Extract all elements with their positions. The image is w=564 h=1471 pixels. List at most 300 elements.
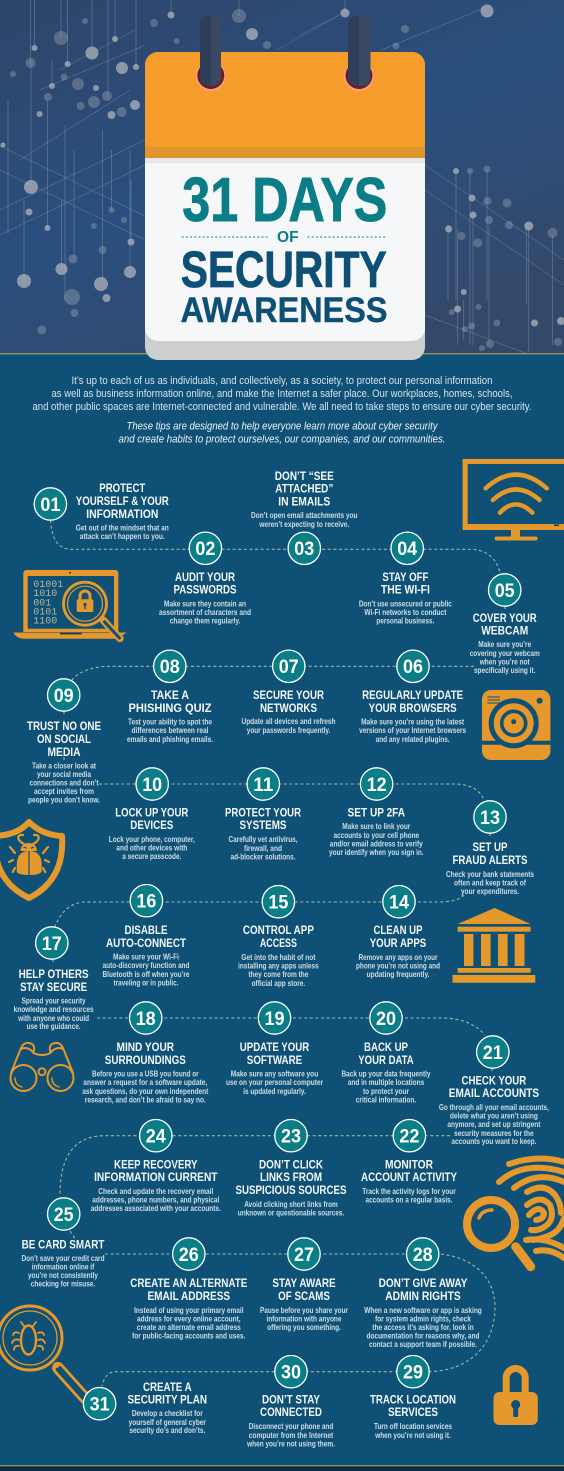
heading 31 <box>128 1380 207 1406</box>
badge 15: 15 <box>268 892 289 914</box>
heading 14: CLEAN UP <box>374 923 422 937</box>
description 27 <box>260 1305 349 1332</box>
description 19: Make sure any software you <box>231 1068 318 1078</box>
description 18: ask questions, do your own independent <box>82 1086 208 1096</box>
tip 06 <box>359 650 466 744</box>
description 01: Get out of the mindset that an <box>76 522 169 532</box>
description 17: knowledge and resources <box>14 1004 94 1014</box>
description 01 <box>76 522 169 541</box>
description 28: contact a support team if possible. <box>369 1339 477 1349</box>
badge 17: 17 <box>42 934 62 955</box>
description 23: unknown or questionable sources. <box>238 1208 344 1218</box>
description 11 <box>228 834 298 862</box>
description 02: Make sure they contain an <box>164 598 246 608</box>
description 10: a secure passcode. <box>122 851 181 861</box>
header network background <box>0 0 564 355</box>
description 09: Take a closer look at <box>32 760 96 770</box>
description 11: ad-blocker solutions. <box>230 852 296 862</box>
heading 21: CHECK YOUR <box>462 1074 527 1088</box>
heading 23: SUSPICIOUS SOURCES <box>236 1183 346 1197</box>
heading 10 <box>115 806 189 832</box>
heading 22: ACCOUNT ACTIVITY <box>361 1170 457 1184</box>
description 22: Track the activity logs for your <box>362 1186 456 1196</box>
heading 06 <box>362 688 463 715</box>
tip 15 <box>238 886 319 988</box>
badge 31: 31 <box>90 1394 110 1416</box>
description 22 <box>362 1186 456 1204</box>
heading 15: CONTROL APP <box>243 923 314 937</box>
description 18: Before you use a USB you found or <box>92 1068 199 1078</box>
tip 01 <box>34 481 169 541</box>
badge 27: 27 <box>294 1245 314 1266</box>
description 08 <box>127 716 213 744</box>
badge 29: 29 <box>403 1362 423 1384</box>
description 26: create an alternate email address <box>137 1322 241 1332</box>
heading 18 <box>105 1040 186 1067</box>
tip 03 <box>251 469 358 564</box>
tip 02 <box>159 532 251 626</box>
heading 12: SET UP 2FA <box>348 806 405 820</box>
description 26 <box>132 1305 245 1340</box>
description 15: Get into the habit of not <box>241 952 316 962</box>
description 01: attack can’t happen to you. <box>80 531 165 541</box>
heading 22 <box>361 1158 457 1184</box>
description 23: Avoid clicking short links from <box>244 1199 338 1209</box>
description 16: auto-discovery function and <box>102 960 190 970</box>
description 03 <box>251 510 358 529</box>
heading 13: FRAUD ALERTS <box>452 853 528 867</box>
description 10 <box>109 834 195 861</box>
heading 13: SET UP <box>472 840 508 854</box>
description 05: Make sure you’re <box>478 639 531 649</box>
binary digits: 01001 <box>33 580 63 591</box>
calendar ring right <box>344 16 374 91</box>
tip 28 <box>364 1238 482 1349</box>
heading 02: AUDIT YOUR <box>175 570 235 584</box>
heading 22: MONITOR <box>385 1158 433 1172</box>
description 31 <box>129 1408 207 1435</box>
description 02: change them regularly. <box>170 616 240 626</box>
description 05: specifically using it. <box>474 665 535 675</box>
description 28: for system admin rights, check <box>375 1314 471 1324</box>
heading 04 <box>381 570 430 596</box>
heading 01 <box>76 481 169 521</box>
description 21: delete what you aren’t using <box>450 1110 538 1120</box>
heading 28: DON’T GIVE AWAY <box>379 1276 467 1290</box>
badge 10: 10 <box>142 775 162 796</box>
description 14: Remove any apps on your <box>358 952 438 962</box>
tip 19 <box>226 1002 324 1096</box>
icon: fingerprint with magnifier <box>467 1158 564 1267</box>
binary digits: 1100 <box>33 617 57 628</box>
description 17: with anyone who could <box>17 1013 89 1023</box>
heading 27: STAY AWARE <box>272 1276 336 1290</box>
description 02 <box>159 598 251 626</box>
description 21: accounts you want to keep. <box>451 1136 536 1146</box>
heading 04: THE WI-FI <box>381 582 430 596</box>
tip 24 <box>91 1120 221 1213</box>
tip 16 <box>102 884 190 988</box>
binary digits: 1010 <box>33 589 57 600</box>
heading 01: INFORMATION <box>86 507 158 521</box>
heading 30 <box>260 1392 322 1419</box>
description 17: use the guidance. <box>27 1021 81 1031</box>
description 28: the access it’s asking for, look in <box>372 1322 474 1332</box>
badge 14: 14 <box>389 892 409 914</box>
description 20: and in multiple locations <box>348 1077 425 1087</box>
description 03: Don’t open email attachments you <box>251 510 358 520</box>
heading 27 <box>272 1276 336 1303</box>
heading 28: ADMIN RIGHTS <box>385 1289 461 1303</box>
heading 26 <box>130 1276 247 1303</box>
description 03: weren’t expecting to receive. <box>259 519 349 529</box>
heading 07: NETWORKS <box>260 701 317 715</box>
tip 17 <box>14 927 94 1031</box>
title <box>180 166 388 330</box>
description 13: often and keep track of <box>454 878 526 888</box>
description 26: address for every online account, <box>137 1314 241 1324</box>
tip 26 <box>130 1238 247 1340</box>
badge 16: 16 <box>136 892 156 912</box>
description 27: information with anyone <box>266 1314 342 1324</box>
title: AWARENESS <box>180 291 388 330</box>
description 17: Spread your security <box>22 996 86 1006</box>
description 21: anymore, and set up stringent <box>447 1119 541 1129</box>
description 27: offering you something. <box>267 1322 341 1332</box>
description 15: installing any apps unless <box>238 960 319 970</box>
description 12: your identify when you sign in. <box>329 847 424 857</box>
description 09: connections and don’t <box>30 778 99 788</box>
heading 08 <box>128 688 212 715</box>
heading 09: ON SOCIAL <box>37 732 91 746</box>
description 28 <box>364 1305 482 1349</box>
heading 05 <box>473 611 537 638</box>
heading 26: EMAIL ADDRESS <box>147 1289 230 1303</box>
heading 06: YOUR BROWSERS <box>369 701 457 715</box>
description 27: Pause before you share your <box>260 1305 349 1315</box>
description 04 <box>359 598 452 626</box>
description 19: is updated regularly. <box>243 1086 306 1096</box>
description 25: you’re not consistently <box>28 1270 98 1280</box>
heading 15: ACCESS <box>260 936 297 950</box>
heading 01: YOURSELF & YOUR <box>76 494 169 508</box>
badge 09: 09 <box>54 686 74 707</box>
icon: camera <box>482 690 550 760</box>
description 02: assortment of characters and <box>159 607 251 617</box>
heading 29 <box>370 1392 456 1419</box>
heading 19: SOFTWARE <box>247 1053 302 1067</box>
heading 10: LOCK UP YOUR <box>115 806 189 820</box>
description 04: Wi-Fi networks to conduct <box>364 607 447 617</box>
description 26: for public-facing accounts and uses. <box>132 1330 245 1340</box>
heading 24: KEEP RECOVERY <box>114 1158 198 1172</box>
description 11: Carefully vet antivirus, <box>228 834 298 844</box>
description 16 <box>102 952 190 988</box>
description 08: emails and phishing emails. <box>127 734 213 744</box>
badge 11: 11 <box>253 775 274 796</box>
heading 08: PHISHING QUIZ <box>128 701 212 715</box>
description 06: Make sure you’re using the latest <box>361 716 464 726</box>
description 20: critical information. <box>356 1094 416 1104</box>
tip 12 <box>329 768 424 857</box>
heading 20 <box>358 1040 414 1067</box>
description 12 <box>329 821 424 857</box>
heading 03: ATTACHED” <box>275 482 333 496</box>
heading 30: CONNECTED <box>260 1405 322 1419</box>
description 09: people you don’t know. <box>28 794 100 804</box>
heading 07: SECURE YOUR <box>253 688 324 702</box>
heading 03: DON’T “SEE <box>275 469 334 483</box>
description 08: Test your ability to spot the <box>128 716 212 726</box>
heading 26: CREATE AN ALTERNATE <box>130 1276 247 1290</box>
description 29: Turn off location services <box>374 1421 452 1431</box>
description 30: when you’re not using them. <box>246 1438 335 1448</box>
tip 18 <box>82 1002 208 1104</box>
badge 25: 25 <box>54 1205 74 1226</box>
description 16: Bluetooth is off when you’re <box>102 969 190 979</box>
badge 07: 07 <box>279 657 299 678</box>
tip 20 <box>342 1002 431 1104</box>
heading 28 <box>379 1276 467 1303</box>
description 25: information online if <box>32 1262 94 1272</box>
heading 17 <box>19 967 89 994</box>
description 09 <box>28 760 100 804</box>
tip 09 <box>27 679 101 804</box>
heading 14: YOUR APPS <box>370 936 426 950</box>
badge 12: 12 <box>367 775 387 796</box>
heading 09: MEDIA <box>48 745 81 759</box>
heading 29: SERVICES <box>388 1405 438 1419</box>
intro text <box>32 375 532 446</box>
description 06: and any related plugins. <box>376 734 450 744</box>
tip 27 <box>260 1238 349 1332</box>
heading 23: LINKS FROM <box>260 1170 322 1184</box>
heading 14 <box>370 923 426 950</box>
tip 10 <box>109 768 195 861</box>
heading 18: MIND YOUR <box>117 1040 174 1054</box>
description 07: your passwords frequently. <box>247 725 330 735</box>
description 07 <box>242 716 336 735</box>
description 12: Make sure to link your <box>342 821 411 831</box>
description 21: security measures for the <box>454 1128 534 1138</box>
description 05: covering your webcam <box>470 648 540 658</box>
description 30: computer from the Internet <box>249 1430 333 1440</box>
heading 21: EMAIL ACCOUNTS <box>449 1086 539 1100</box>
description 15: official app store. <box>252 978 305 988</box>
heading 19: UPDATE YOUR <box>240 1040 309 1054</box>
description 26: Instead of using your primary email <box>134 1305 244 1315</box>
binary digits: 001 <box>33 598 51 609</box>
description 13: your expenditures. <box>461 886 519 896</box>
tip 04 <box>359 532 452 626</box>
heading 17: STAY SECURE <box>20 980 87 994</box>
tip 14 <box>356 886 440 979</box>
description 25: Don’t save your credit card <box>22 1253 104 1263</box>
icon: magnifier with bug <box>0 1306 85 1398</box>
badge 02: 02 <box>195 539 215 560</box>
description 17 <box>14 996 94 1031</box>
description 31: yourself of general cyber <box>129 1417 207 1427</box>
heading 02 <box>174 570 236 596</box>
icon: laptop with padlock magnifier <box>13 570 127 639</box>
description 24: Check and update the recovery email <box>98 1186 213 1196</box>
description 23 <box>238 1199 344 1218</box>
description 15 <box>238 952 319 988</box>
heading 01: PROTECT <box>99 481 146 495</box>
description 10: and other devices with <box>116 842 187 852</box>
heading 21 <box>449 1074 539 1100</box>
description 14 <box>356 952 440 979</box>
tip 05 <box>470 574 540 675</box>
heading 09: TRUST NO ONE <box>27 719 101 733</box>
heading 15 <box>243 923 314 950</box>
footer band <box>0 1465 564 1471</box>
description 13: Check your bank statements <box>446 869 534 879</box>
intro text: and create habits to protect ourselves, our companies, and our communities. <box>118 434 446 446</box>
icon: monitor with wi-fi <box>463 459 564 540</box>
tip 31 <box>83 1380 207 1435</box>
badge 20: 20 <box>376 1009 396 1030</box>
description 05 <box>470 639 540 675</box>
description 07: Update all devices and refresh <box>242 716 336 726</box>
heading 03: IN EMAILS <box>278 494 330 508</box>
heading 04: STAY OFF <box>382 570 428 584</box>
badge 26: 26 <box>179 1245 199 1266</box>
heading 24: INFORMATION CURRENT <box>94 1170 218 1184</box>
description 13 <box>446 869 534 896</box>
icon: binoculars <box>10 1043 74 1091</box>
heading 10: DEVICES <box>130 818 173 832</box>
description 11: firewall, and <box>244 843 282 853</box>
heading 05: COVER YOUR <box>473 611 537 625</box>
heading 07 <box>253 688 324 715</box>
description 28: documentation for reasons why, and <box>366 1330 480 1340</box>
description 20: to protect your <box>363 1086 410 1096</box>
badge 21: 21 <box>483 1043 503 1064</box>
tip 23 <box>236 1120 346 1218</box>
description 12: and/or email address to verify <box>330 838 423 848</box>
badge 23: 23 <box>281 1126 301 1148</box>
tip 11 <box>225 768 301 862</box>
description 04: Don’t use unsecured or public <box>359 598 452 608</box>
tip 30 <box>246 1356 335 1448</box>
calendar ring left <box>196 16 226 91</box>
heading 05: WEBCAM <box>481 624 528 638</box>
badge 06: 06 <box>403 657 423 678</box>
heading 24 <box>94 1158 218 1184</box>
heading 11: SYSTEMS <box>240 818 286 832</box>
title: OF <box>277 229 299 246</box>
heading 09 <box>27 719 101 759</box>
heading 16: DISABLE <box>124 923 168 937</box>
tip 29 <box>370 1356 456 1440</box>
badge 24: 24 <box>146 1126 166 1148</box>
heading 23: DON’T CLICK <box>259 1158 323 1172</box>
title: SECURITY <box>181 241 387 298</box>
heading 16: AUTO-CONNECT <box>106 936 187 950</box>
description 09: your social media <box>37 769 91 779</box>
badge 08: 08 <box>160 657 180 678</box>
heading 23 <box>236 1158 346 1197</box>
description 18: answer a request for a software update, <box>83 1077 207 1087</box>
description 10: Lock your phone, computer, <box>109 834 195 844</box>
description 25: checking for misuse. <box>31 1278 95 1288</box>
description 31: security do’s and don’ts. <box>129 1425 205 1435</box>
tip 07 <box>242 650 336 735</box>
description 15: they come from the <box>248 969 309 979</box>
description 31: Develop a checklist for <box>132 1408 203 1418</box>
description 14: phone you’re not using and <box>356 960 440 970</box>
description 24 <box>91 1186 221 1213</box>
description 30: Disconnect your phone and <box>249 1421 333 1431</box>
description 16: Make sure your Wi-Fi <box>113 952 179 962</box>
binary digits: 0101 <box>33 608 57 619</box>
heading 19 <box>240 1040 309 1067</box>
description 06 <box>359 716 466 744</box>
heading 31: SECURITY PLAN <box>128 1392 207 1406</box>
description 18 <box>82 1068 208 1104</box>
badge 05: 05 <box>495 581 515 602</box>
heading 25: BE CARD SMART <box>22 1238 105 1252</box>
icon: shield with bug <box>0 822 62 898</box>
heading 29: TRACK LOCATION <box>370 1392 456 1406</box>
description 05: when you’re not <box>479 656 530 666</box>
description 18: research, and don’t be afraid to say no. <box>85 1094 206 1104</box>
heading 18: SURROUNDINGS <box>105 1053 186 1067</box>
header divider line <box>0 353 564 354</box>
description 24: addresses, phone numbers, and physical <box>92 1194 219 1204</box>
heading 20: YOUR DATA <box>358 1053 414 1067</box>
description 06: versions of your Internet browsers <box>359 725 466 735</box>
icon: padlock <box>494 1368 538 1425</box>
description 29 <box>374 1421 452 1440</box>
heading 27: OF SCAMS <box>278 1289 330 1303</box>
description 14: updating frequently. <box>366 969 430 979</box>
heading 30: DON’T STAY <box>262 1392 320 1406</box>
intro text: It’s up to each of us as individuals, and collectively, as a society, to protect our personal information <box>72 375 492 387</box>
heading 31: CREATE A <box>143 1380 192 1394</box>
binary digits <box>33 580 63 628</box>
icon: bank building <box>452 908 535 983</box>
description 22: accounts on a regular basis. <box>366 1194 452 1204</box>
heading 11 <box>225 806 301 832</box>
tip 08 <box>127 650 213 744</box>
tip 13 <box>446 801 534 896</box>
description 09: accept invites from <box>34 786 94 796</box>
badge 04: 04 <box>397 539 418 560</box>
description 25 <box>22 1253 104 1288</box>
description 28: When a new software or app is asking <box>364 1305 482 1315</box>
description 04: personal business. <box>376 616 434 626</box>
intro text: These tips are designed to help everyone learn more about cyber security <box>126 420 439 432</box>
badge 30: 30 <box>281 1362 301 1384</box>
description 21 <box>439 1102 549 1146</box>
heading 20: BACK UP <box>364 1040 408 1054</box>
badge 01: 01 <box>40 495 61 516</box>
description 29: when you’re not using it. <box>374 1430 451 1440</box>
description 19: use on your personal computer <box>226 1077 324 1087</box>
badge 13: 13 <box>480 808 500 829</box>
dashed connector path <box>50 520 505 1386</box>
description 19 <box>226 1068 324 1096</box>
heading 13 <box>452 840 528 867</box>
description 16: traveling or in public. <box>114 978 178 988</box>
tip 21 <box>439 1036 549 1146</box>
heading 02: PASSWORDS <box>174 582 236 596</box>
heading 11: PROTECT YOUR <box>225 806 301 820</box>
heading 16 <box>106 923 187 950</box>
tip 25 <box>22 1198 105 1288</box>
